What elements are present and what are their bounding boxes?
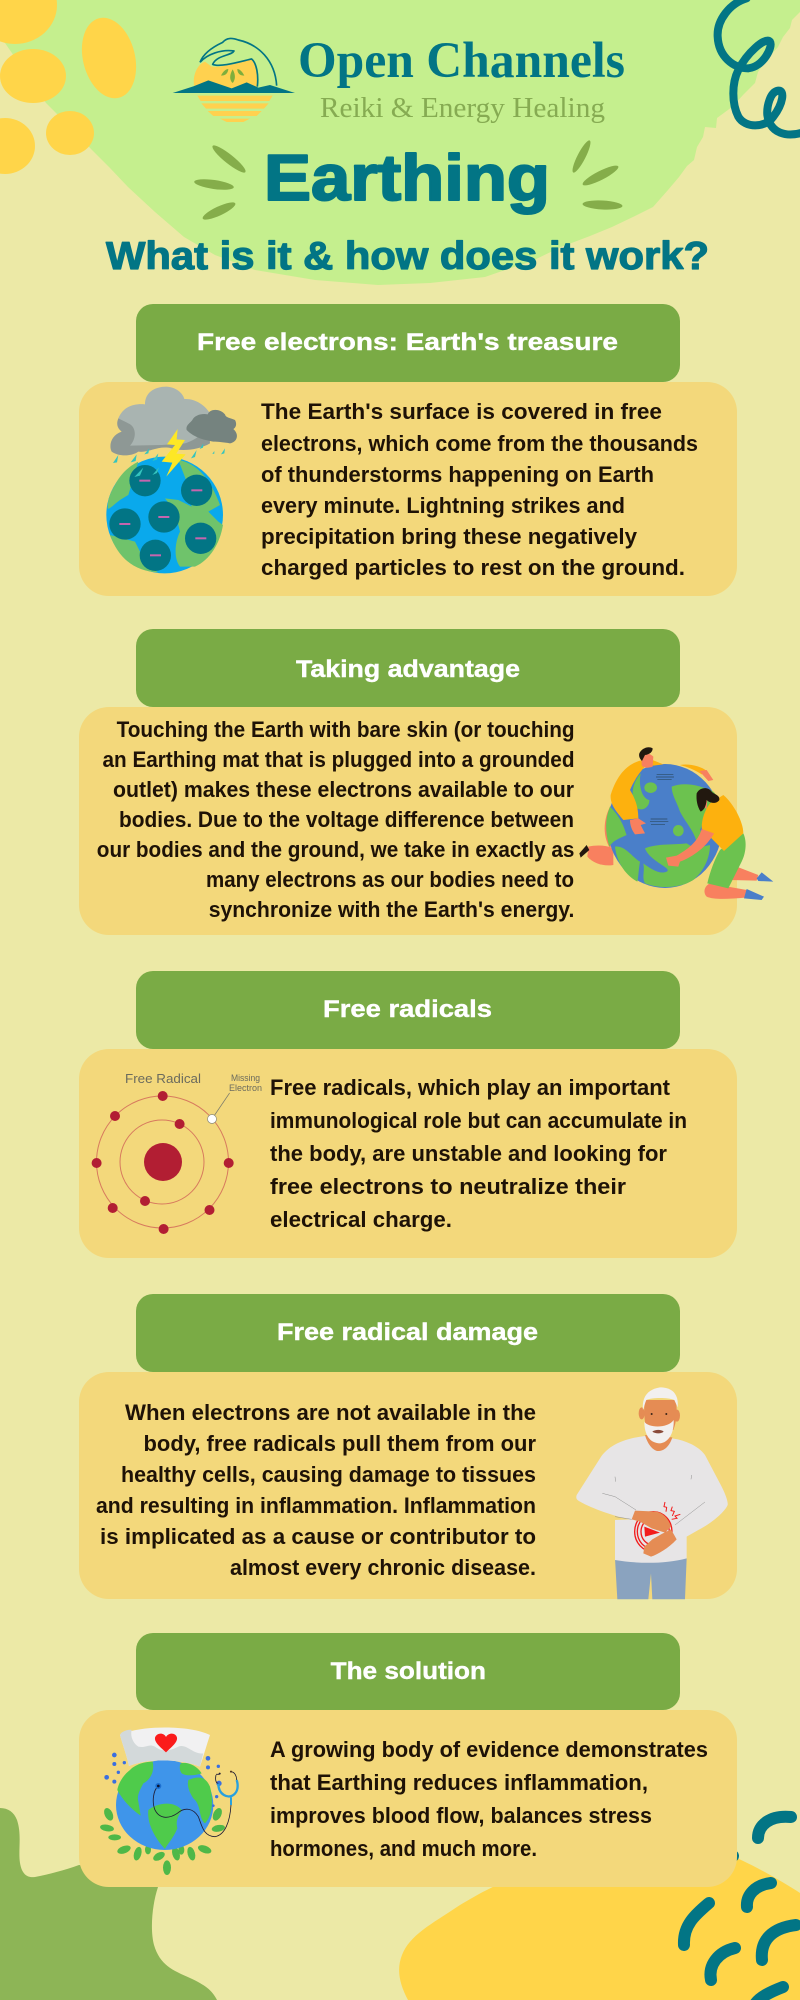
title: Earthing (264, 141, 550, 214)
decorative yellow dots (0, 0, 144, 174)
heading bar 2: Taking advantage (296, 656, 520, 683)
card 3 text (270, 1075, 687, 1232)
card 4 text: When electrons are not available in the (125, 1400, 536, 1425)
decorative bottom blobs (0, 1808, 800, 2000)
card 2 text: bodies. Due to the voltage difference between (119, 807, 574, 832)
diagram: free radical atom (92, 1071, 262, 1234)
card 5 text (270, 1737, 708, 1861)
card 2 text: Touching the Earth with bare skin (or touching (117, 717, 575, 742)
logo wordmark: Open Channels (298, 33, 625, 89)
logo wordmark (298, 33, 625, 124)
decorative teal squiggle (718, 0, 800, 134)
illustration: man with abdominal pain (576, 1387, 728, 1599)
title sparks (194, 139, 623, 223)
card 2 (79, 707, 737, 935)
card 2 text (97, 717, 575, 922)
card 1 text (261, 399, 698, 580)
logo wordmark: Reiki & Energy Healing (320, 93, 605, 124)
card 1 text: The Earth's surface is covered in free (261, 399, 662, 424)
card 4 text: healthy cells, causing damage to tissues (121, 1462, 536, 1487)
background blob: light green header shape (0, 0, 800, 285)
card 1 text: every minute. Lightning strikes and (261, 493, 625, 518)
card 4 text: body, free radicals pull them from our (144, 1431, 536, 1456)
icon: earth with nurse cap and stethoscope (100, 1727, 238, 1875)
card 3 text: free electrons to neutralize their (270, 1174, 626, 1199)
card 5 text: that Earthing reduces inflammation, (270, 1770, 648, 1795)
panel 4: free radical damage (79, 1294, 737, 1599)
card 5 (79, 1710, 737, 1887)
diagram: free radical atom: Free Radical (125, 1071, 201, 1086)
heading bar 5: The solution (331, 1658, 486, 1685)
card 5 text: A growing body of evidence demonstrates (270, 1737, 708, 1762)
panel 5: the solution (79, 1633, 737, 1887)
card 1 (79, 382, 737, 596)
card 2 text: many electrons as our bodies need to (206, 867, 574, 892)
card 5 text: hormones, and much more. (270, 1836, 537, 1861)
card 4 text (96, 1400, 536, 1580)
heading bar 5 (136, 1633, 680, 1710)
heading bar 1 (136, 304, 680, 382)
diagram: free radical atom: Missing (231, 1073, 260, 1083)
card 3 text: Free radicals, which play an important (270, 1075, 671, 1100)
card 1 text: precipitation bring these negatively (261, 524, 638, 549)
heading bar 4: Free radical damage (277, 1319, 538, 1346)
subtitle: What is it & how does it work? (106, 235, 709, 278)
card 2 text: synchronize with the Earth's energy. (209, 897, 574, 922)
card 3 text: the body, are unstable and looking for (270, 1141, 667, 1166)
heading bar 3: Free radicals (323, 996, 492, 1023)
card 2 text: our bodies and the ground, we take in exactly as (97, 837, 574, 862)
heading bar 1: Free electrons: Earth's treasure (197, 329, 618, 356)
logo icon: hand over sun and mountains (173, 38, 295, 122)
card 1 text: of thunderstorms happening on Earth (261, 462, 654, 487)
card 1 text: charged particles to rest on the ground. (261, 555, 685, 580)
card 4 text: is implicated as a cause or contributor to (100, 1524, 536, 1549)
card 3 (79, 1049, 737, 1258)
panel 3: free radicals (79, 971, 737, 1258)
card 3 text: electrical charge. (270, 1207, 452, 1232)
diagram: free radical atom: Electron (229, 1083, 262, 1093)
heading bar 4 (136, 1294, 680, 1372)
panel 1: free electrons (79, 304, 737, 596)
card 1 text: electrons, which come from the thousands (261, 431, 698, 456)
card 5 text: improves blood flow, balances stress (270, 1803, 652, 1828)
card 4 text: almost every chronic disease. (230, 1555, 536, 1580)
heading bar 2 (136, 629, 680, 707)
icon: storm over earth with electrons (106, 387, 237, 573)
card 3 text: immunological role but can accumulate in (270, 1108, 687, 1133)
card 4 (79, 1372, 737, 1599)
heading bar 3 (136, 971, 680, 1049)
card 4 text: and resulting in inflammation. Inflammation (96, 1493, 536, 1518)
card 2 text: an Earthing mat that is plugged into a grounded (102, 747, 574, 772)
illustration: two people hugging the earth (579, 747, 773, 900)
card 2 text: outlet) makes these electrons available to our (113, 777, 574, 802)
panel 2: taking advantage (79, 629, 773, 935)
